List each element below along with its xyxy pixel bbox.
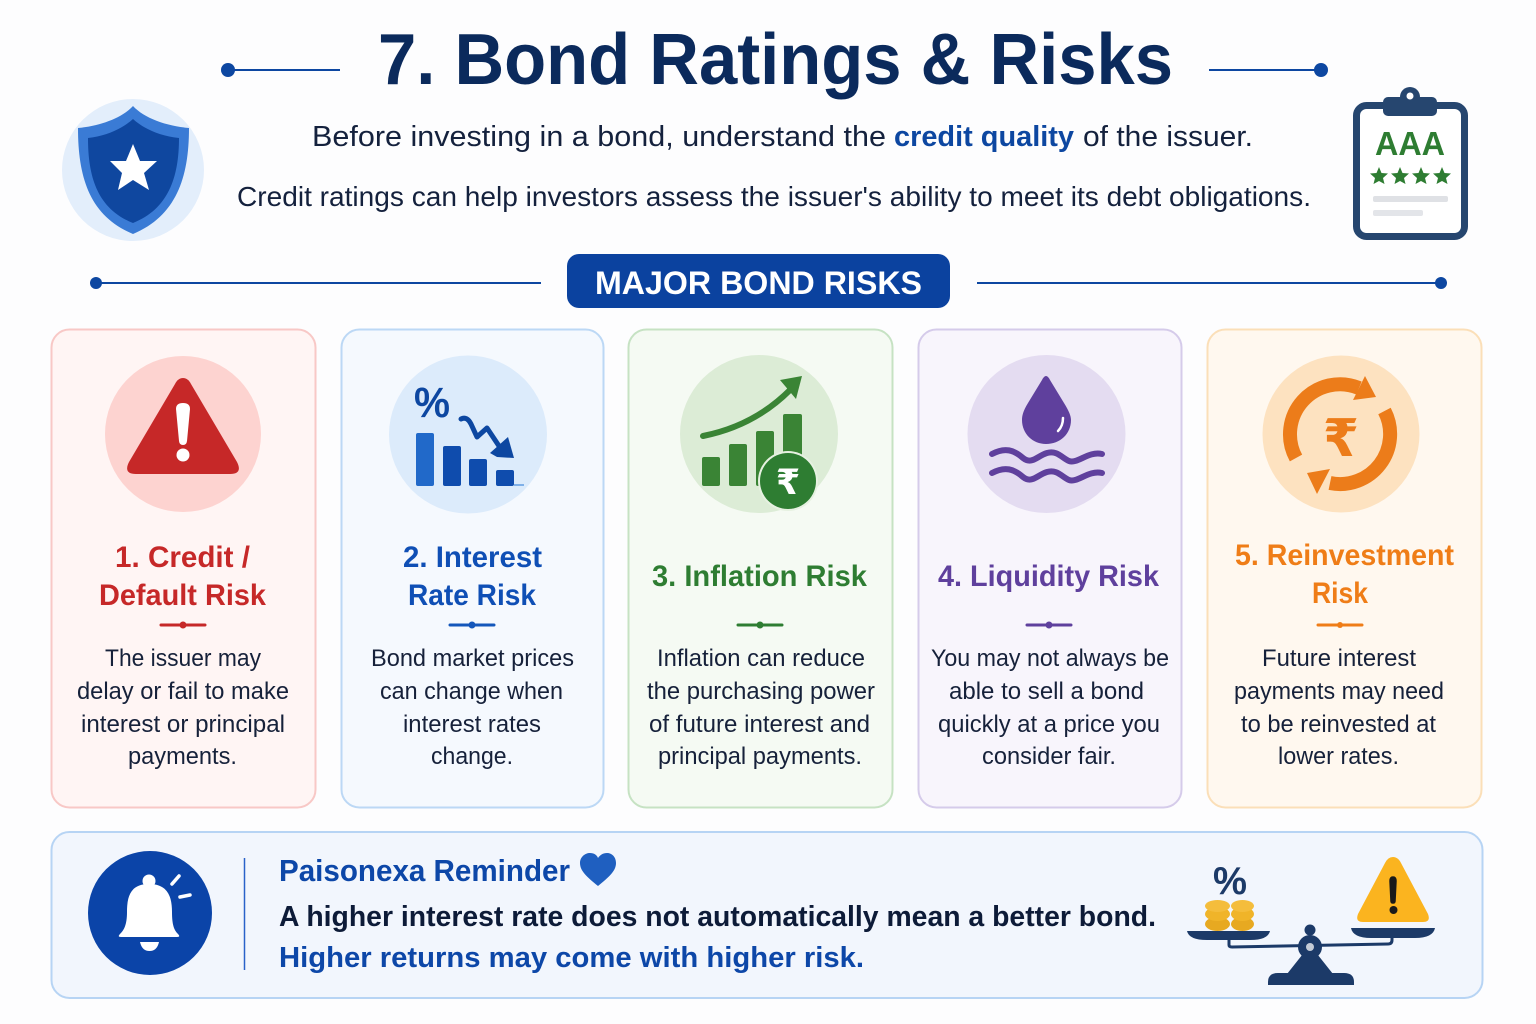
panel: inflation risk — [628, 330, 892, 808]
icon: AAA rating clipboard — [1356, 87, 1464, 236]
heading: Default Risk — [99, 579, 266, 612]
panel: reminder callout — [52, 832, 1482, 998]
icon: rupee reinvestment cycle — [1262, 356, 1420, 512]
heading: 5. Reinvestment — [1235, 539, 1454, 572]
reminder text: A higher interest rate does not automatically mean a better bond. — [279, 901, 1156, 933]
description: lower rates. — [1278, 743, 1399, 770]
icon: water drop and waves — [968, 355, 1126, 513]
heading: 2. Interest — [403, 541, 542, 574]
intro text: Before investing in a bond, understand the — [312, 121, 886, 153]
panel: interest rate risk — [342, 330, 604, 808]
description: Bond market prices — [371, 645, 574, 672]
description: payments. — [128, 743, 237, 770]
icon: shield with star — [62, 99, 204, 241]
description: consider fair. — [982, 743, 1116, 770]
panel: liquidity risk — [918, 330, 1182, 808]
description: Future interest — [1262, 645, 1416, 672]
icon: balance scale weighing interest and risk: % — [1213, 860, 1247, 903]
heading: 4. Liquidity Risk — [938, 560, 1159, 593]
intro text — [237, 121, 1311, 212]
description: able to sell a bond — [949, 678, 1144, 705]
description — [77, 645, 289, 770]
intro text: credit quality — [894, 121, 1074, 153]
description — [647, 645, 875, 770]
icon: rupee reinvestment cycle: ₹ — [1323, 410, 1359, 468]
description: interest or principal — [81, 711, 285, 738]
description: principal payments. — [658, 743, 862, 770]
icon: rising bars with rupee: ₹ — [776, 463, 800, 502]
description: quickly at a price you — [938, 711, 1160, 738]
description: of future interest and — [649, 711, 870, 738]
description: interest rates — [403, 711, 541, 738]
heading: 3. Inflation Risk — [652, 560, 867, 593]
description: You may not always be — [931, 645, 1169, 672]
icon: falling bars and percent — [389, 356, 547, 514]
reminder heading: Paisonexa Reminder — [279, 853, 570, 888]
icon: AAA rating clipboard: AAA — [1375, 125, 1445, 162]
description — [371, 645, 574, 770]
icon: bell — [88, 851, 212, 975]
reminder text — [279, 901, 1156, 974]
heading: 1. Credit / — [115, 541, 251, 574]
description: payments may need — [1234, 678, 1444, 705]
description — [931, 645, 1169, 770]
icon: rising bars with rupee — [680, 355, 838, 513]
panel: credit default risk — [52, 330, 316, 808]
section heading banner: MAJOR BOND RISKS — [595, 265, 922, 301]
icon: balance scale weighing interest and risk — [1187, 857, 1435, 985]
description: to be reinvested at — [1241, 711, 1436, 738]
intro text: of the issuer. — [1083, 121, 1253, 153]
section heading banner — [90, 254, 1447, 308]
reminder text: Higher returns may come with higher risk. — [279, 942, 864, 974]
title: 7. Bond Ratings & Risks — [378, 20, 1173, 100]
icon: falling bars and percent: % — [414, 379, 450, 427]
heading: Rate Risk — [408, 579, 536, 612]
description: the purchasing power — [647, 678, 875, 705]
icon: warning triangle — [105, 356, 261, 512]
description: Inflation can reduce — [657, 645, 865, 672]
description: delay or fail to make — [77, 678, 289, 705]
description: can change when — [380, 678, 563, 705]
description: change. — [431, 743, 513, 770]
panel: reinvestment risk — [1208, 330, 1482, 808]
heading: Risk — [1312, 577, 1368, 610]
description: The issuer may — [105, 645, 261, 672]
description — [1234, 645, 1444, 770]
intro text: Credit ratings can help investors assess the issuer's ability to meet its debt obligations. — [237, 181, 1311, 212]
